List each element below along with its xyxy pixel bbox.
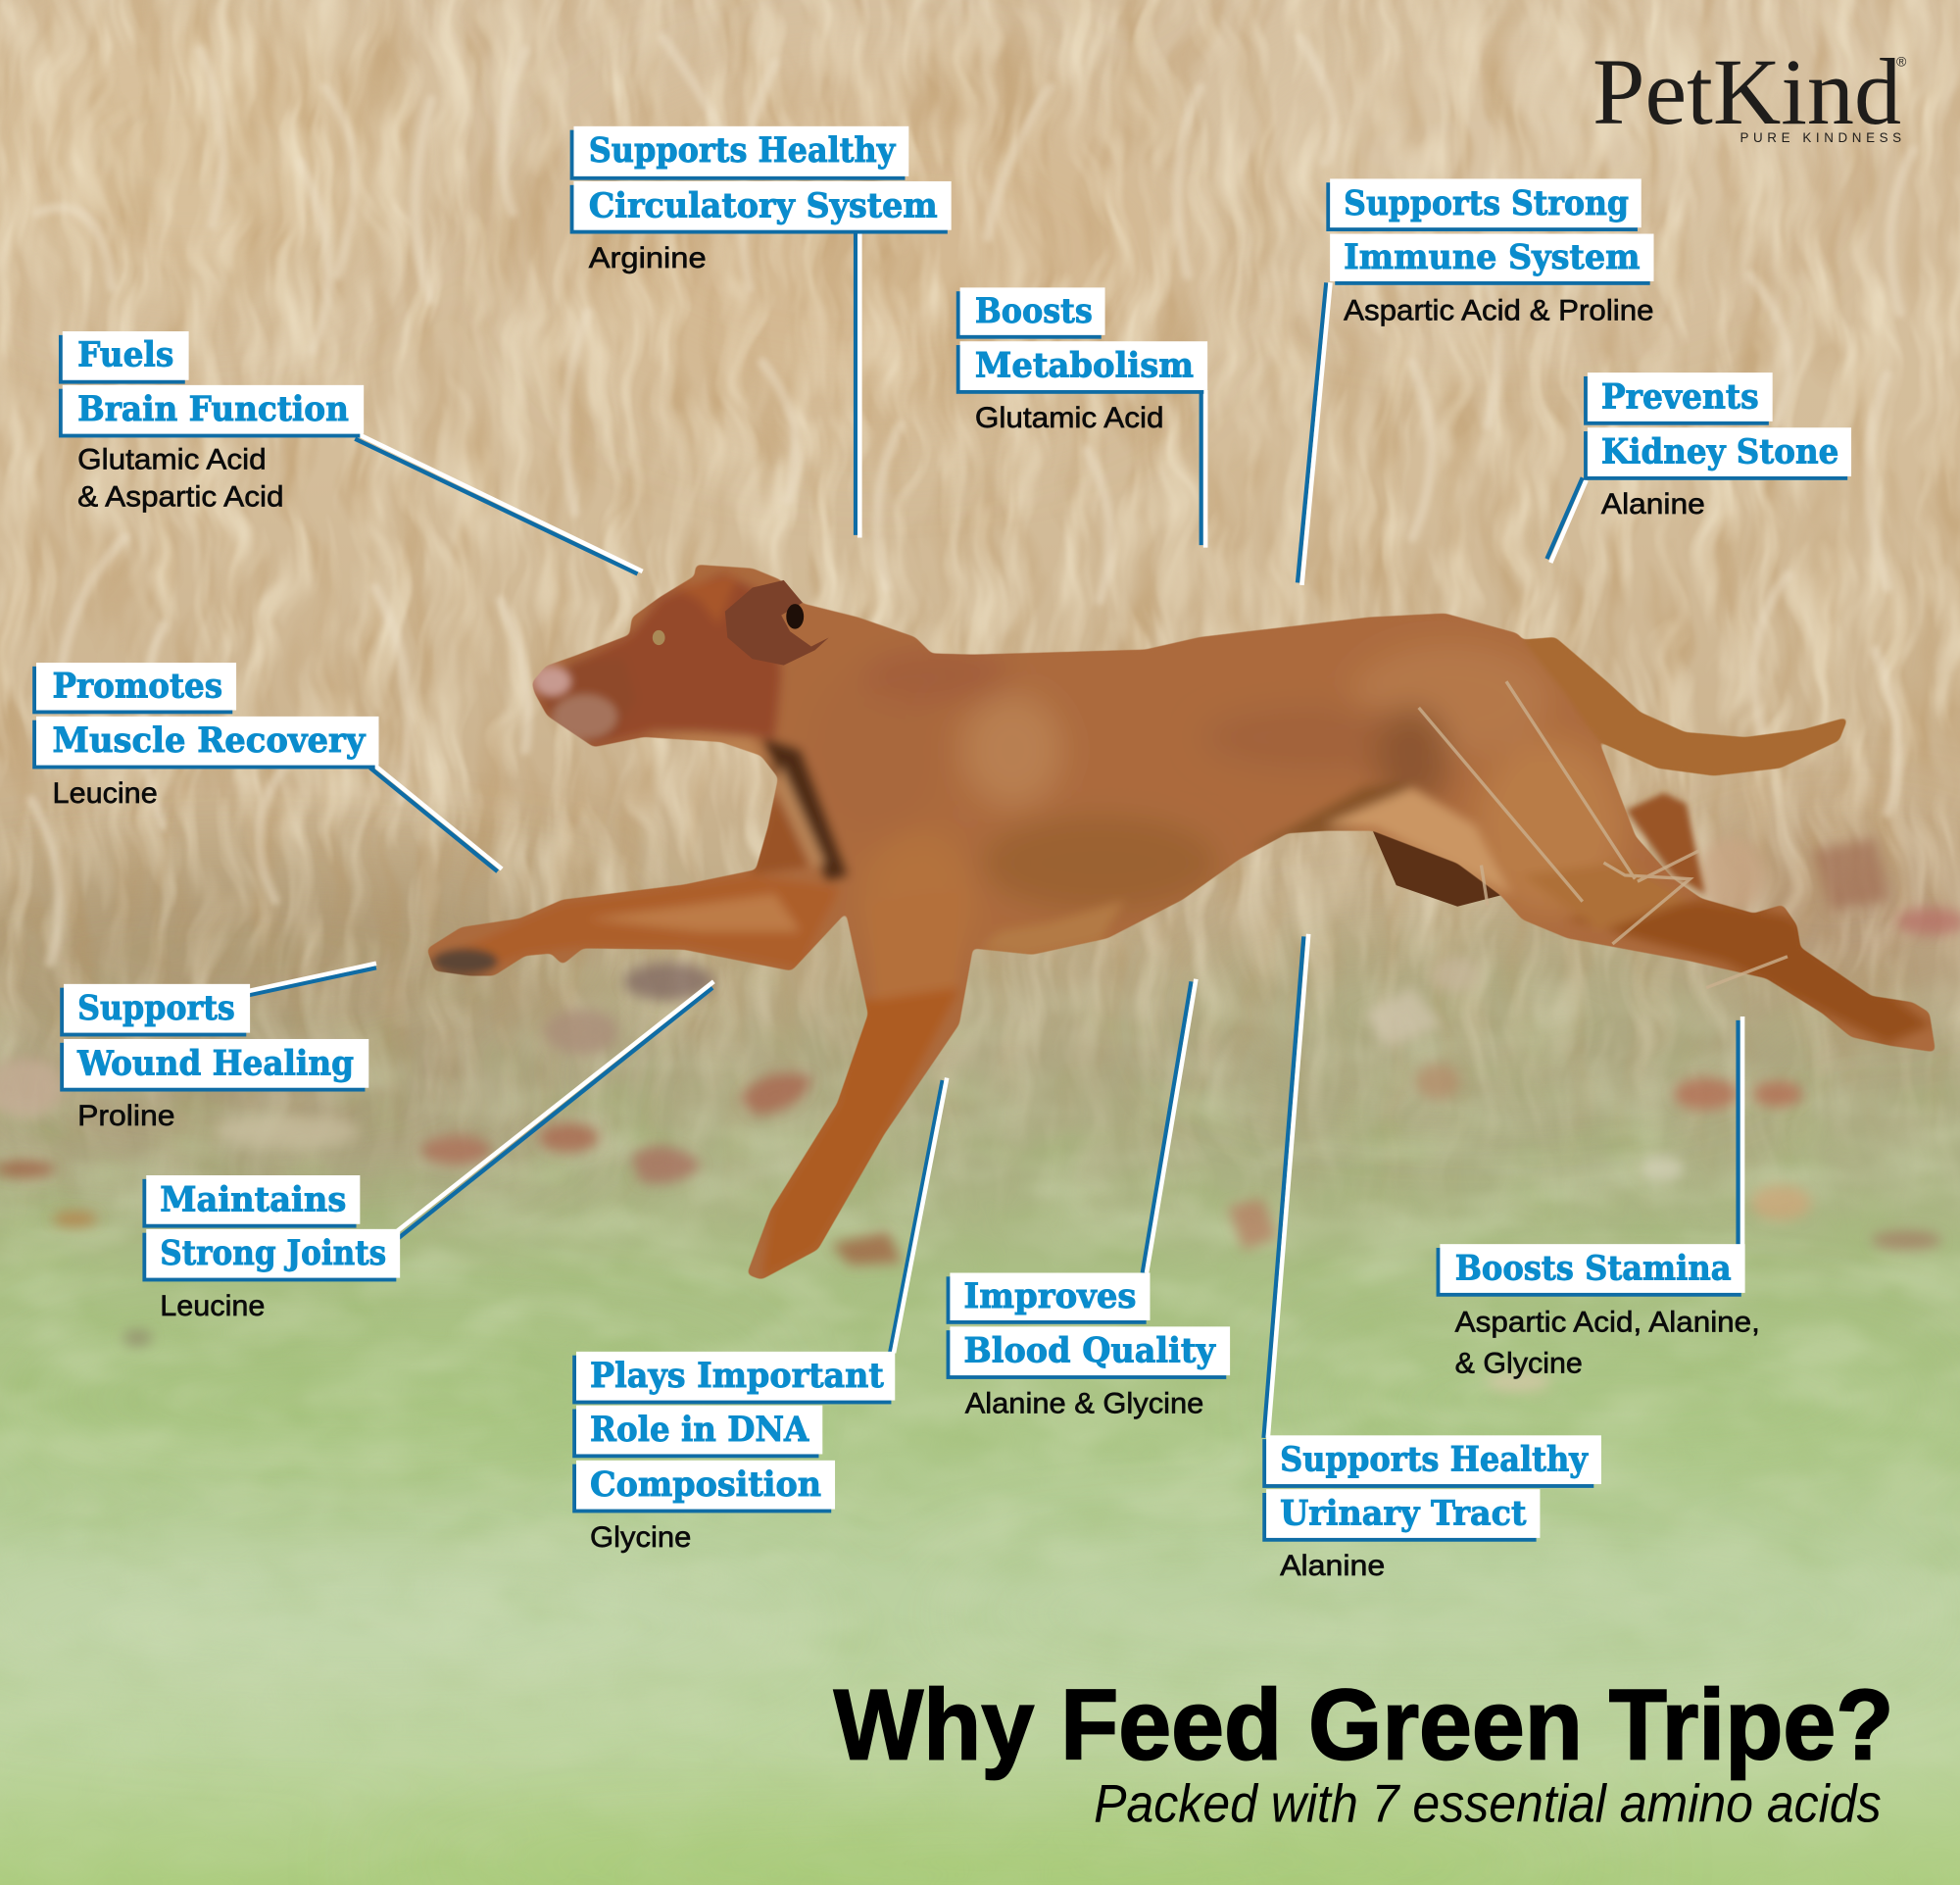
heading line: Blood Quality: Blood Quality [963, 1332, 1216, 1371]
callout: Improves Blood Quality [947, 979, 1230, 1419]
heading line: Muscle Recovery [32, 717, 378, 769]
amino acid: Leucine: Leucine [160, 1290, 265, 1322]
callout: Boosts Metabolism [956, 287, 1207, 548]
arrow: leader line [856, 230, 859, 537]
heading line: Role in DNA: Role in DNA [590, 1411, 809, 1450]
amino acids: Aspartic Acid, Alanine and Glycine: Aspartic Acid, Alanine, [1455, 1306, 1760, 1338]
logo wordmark: PetKind [1592, 39, 1901, 144]
heading line: Maintains [142, 1175, 360, 1228]
arrow: leader line [1143, 979, 1196, 1272]
heading line: Boosts [956, 287, 1105, 339]
heading line: Fuels: Fuels [77, 336, 173, 375]
heading line: Boosts Stamina [1437, 1244, 1745, 1297]
heading line: Kidney Stone [1584, 427, 1851, 480]
heading line: Supports [60, 984, 250, 1036]
amino acid: Arginine: Arginine [589, 242, 707, 274]
dog silhouette with shading [427, 566, 1935, 1279]
wrinkled lips [553, 694, 617, 739]
tail [1523, 638, 1847, 775]
heading line: Promotes [32, 663, 236, 714]
arrow: leader line [1201, 390, 1205, 548]
body [427, 566, 1935, 1279]
amino acid: Glycine: Glycine [590, 1521, 691, 1554]
heading line: Supports Healthy: Supports Healthy [1280, 1441, 1589, 1480]
callout: Prevents Kidney Stone [1546, 372, 1851, 563]
ear [725, 580, 829, 666]
amino acids: Glutamic Acid and Aspartic Acid [77, 443, 284, 514]
eye [653, 630, 665, 645]
heading line: Supports Strong: Supports Strong [1344, 184, 1629, 223]
amino acid: Aspartic Acid & Proline: Aspartic Acid & Proline [1344, 295, 1654, 327]
heading line: Fuels [59, 331, 189, 384]
heading line: Supports Healthy [1262, 1435, 1601, 1488]
heading line: Metabolism: Metabolism [975, 347, 1194, 386]
heading line: Supports Healthy: Supports Healthy [589, 131, 896, 171]
heading line: Wound Healing: Wound Healing [76, 1044, 354, 1083]
heading line: Muscle Recovery: Muscle Recovery [53, 721, 366, 761]
nose [534, 667, 571, 696]
amino acid: Alanine: Alanine [1280, 1550, 1385, 1582]
heading line: Supports Strong [1326, 178, 1642, 231]
arrow: leader line [248, 964, 376, 995]
amino acid: Glutamic Acid: Glutamic Acid [975, 402, 1164, 434]
logo tagline: PURE KINDNESS [1740, 130, 1901, 145]
heading line: Promotes: Promotes [53, 668, 222, 707]
amino acid: Alanine: Alanine [1601, 488, 1705, 521]
grass stems across hind leg [1419, 681, 1788, 988]
amino acid: Leucine: Leucine [53, 777, 158, 810]
callout: Supports Healthy Urinary Tract [1262, 934, 1601, 1582]
heading line: Maintains: Maintains [160, 1180, 346, 1219]
leaves on the grass [0, 838, 1960, 1393]
heading line: Kidney Stone: Kidney Stone [1601, 433, 1838, 472]
amino acids: Aspartic Acid, Alanine and Glycine [1455, 1306, 1760, 1380]
heading line: Boosts Stamina: Boosts Stamina [1455, 1250, 1732, 1289]
subtitle: Packed with 7 essential amino acids [1094, 1772, 1882, 1833]
amino acids: Aspartic Acid, Alanine and Glycine: & Glycine [1455, 1348, 1583, 1380]
arrow: leader line [370, 765, 502, 871]
amino acid: Proline: Proline [77, 1100, 175, 1132]
front paw toes [432, 949, 498, 974]
callout: Plays Important Role in DNA Composition [572, 1078, 947, 1554]
heading line: Improves: Improves [963, 1277, 1136, 1316]
heading line: Brain Function [59, 385, 364, 437]
heading line: Metabolism [956, 341, 1207, 394]
amino acids: Glutamic Acid and Aspartic Acid: & Aspartic Acid [77, 481, 284, 514]
arrow: leader line [395, 981, 713, 1238]
callout: Supports Wound Healing [60, 964, 376, 1132]
heading line: Composition: Composition [590, 1465, 821, 1505]
callout: Maintains Strong Joints [142, 981, 713, 1322]
heading line: Composition [572, 1461, 835, 1513]
callout: Boosts Stamina [1437, 1017, 1760, 1380]
heading line: Blood Quality [947, 1326, 1230, 1379]
dog running [427, 566, 1935, 1279]
logo: PetKind [1592, 39, 1907, 145]
ear hole [786, 604, 804, 629]
title: Why Feed Green Tripe? [834, 1669, 1893, 1781]
callout: Supports Healthy Circulatory System [570, 126, 952, 537]
heading line: Prevents: Prevents [1601, 377, 1759, 417]
heading line: Role in DNA [572, 1406, 822, 1458]
arrow: leader line [1298, 282, 1331, 585]
heading line: Circulatory System: Circulatory System [589, 186, 938, 225]
callout: Promotes Muscle Recovery [32, 663, 502, 871]
heading line: Strong Joints: Strong Joints [160, 1234, 386, 1273]
arrow: leader line [1264, 934, 1308, 1438]
heading line: Supports Healthy [570, 126, 908, 180]
far hind leg [1373, 830, 1501, 907]
heading line: Plays Important: Plays Important [590, 1357, 884, 1396]
logo registered mark: ® [1896, 54, 1907, 70]
arrow: leader line [355, 434, 643, 573]
arrow: leader line [1739, 1017, 1742, 1247]
amino acid: Alanine & Glycine: Alanine & Glycine [965, 1387, 1203, 1419]
callout: Supports Strong Immune System [1298, 178, 1654, 585]
heading line: Urinary Tract [1262, 1489, 1540, 1542]
heading line: Strong Joints [142, 1229, 400, 1281]
heading line: Supports: Supports [77, 989, 235, 1028]
heading line: Prevents [1584, 372, 1773, 425]
heading line: Boosts: Boosts [975, 292, 1093, 331]
heading line: Improves [947, 1272, 1150, 1324]
heading line: Immune System: Immune System [1344, 238, 1640, 277]
heading line: Urinary Tract: Urinary Tract [1280, 1495, 1526, 1534]
arrow: leader line [890, 1078, 947, 1353]
far hind foot [1626, 793, 1705, 894]
amino acids: Glutamic Acid and Aspartic Acid: Glutamic Acid [77, 443, 267, 475]
callout: Fuels Brain Function [59, 331, 643, 573]
arrow: leader line [1546, 477, 1587, 563]
heading line: Brain Function: Brain Function [77, 390, 349, 429]
